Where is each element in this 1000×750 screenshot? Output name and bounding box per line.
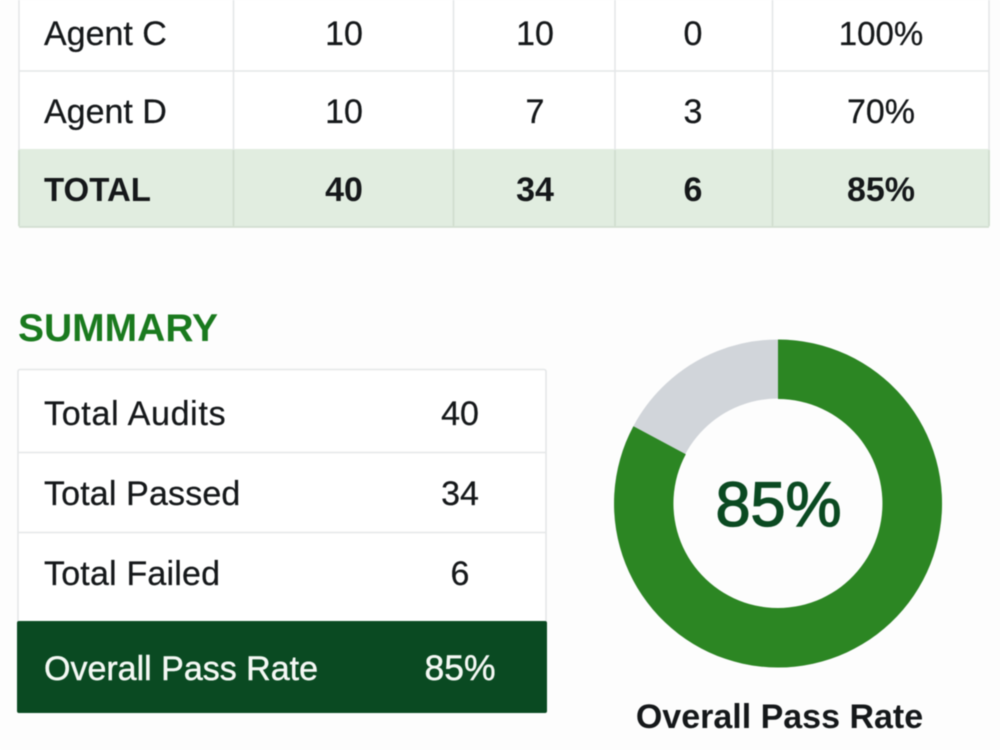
row: total audits: 40: [441, 395, 479, 433]
row: TOTAL: 34: [516, 171, 554, 209]
donut track: remaining share: [644, 369, 912, 638]
donut arc: passed share: [614, 340, 942, 667]
row: total audits: [44, 395, 479, 433]
row: Agent D: 70%: [847, 93, 915, 131]
row: Agent D: [44, 93, 915, 131]
row: Agent C: 10: [325, 15, 363, 53]
row: total passed: Total Passed: [44, 475, 240, 513]
row: TOTAL: [44, 171, 915, 209]
row: TOTAL: 40: [325, 171, 363, 209]
row: total passed: 34: [441, 475, 479, 513]
row: total failed: Total Failed: [44, 555, 220, 593]
row: Agent D: 7: [526, 93, 544, 131]
row: Agent C: Agent C: [44, 15, 167, 53]
chart: overall pass rate donut: [614, 340, 942, 667]
row: Agent C: 100%: [839, 15, 923, 52]
row: total passed: [44, 475, 479, 513]
donut value: 85%: [715, 470, 842, 540]
row: total failed: [44, 555, 469, 593]
row: TOTAL: 85%: [847, 171, 915, 209]
row: overall pass rate: [17, 621, 547, 713]
row: Agent C: [44, 15, 923, 53]
row: Agent D: 10: [325, 93, 363, 131]
row: overall pass rate: 85%: [424, 648, 496, 688]
row: TOTAL: 6: [684, 171, 702, 209]
panel: summary table: [17, 370, 547, 713]
row: Agent C: 0: [684, 15, 702, 53]
row: Agent D: 3: [684, 93, 702, 131]
heading: summary: SUMMARY: [18, 307, 218, 350]
row: Agent C: 10: [516, 15, 554, 53]
row: overall pass rate: Overall Pass Rate: [44, 650, 318, 688]
row: Agent D: Agent D: [44, 93, 167, 131]
panel: agent results table: [18, 0, 990, 227]
row: TOTAL: TOTAL: [44, 171, 151, 208]
row: total audits: Total Audits: [44, 395, 226, 433]
total row background: [18, 149, 990, 227]
row: total failed: 6: [451, 555, 469, 593]
chart label: Overall Pass Rate: [636, 698, 923, 736]
